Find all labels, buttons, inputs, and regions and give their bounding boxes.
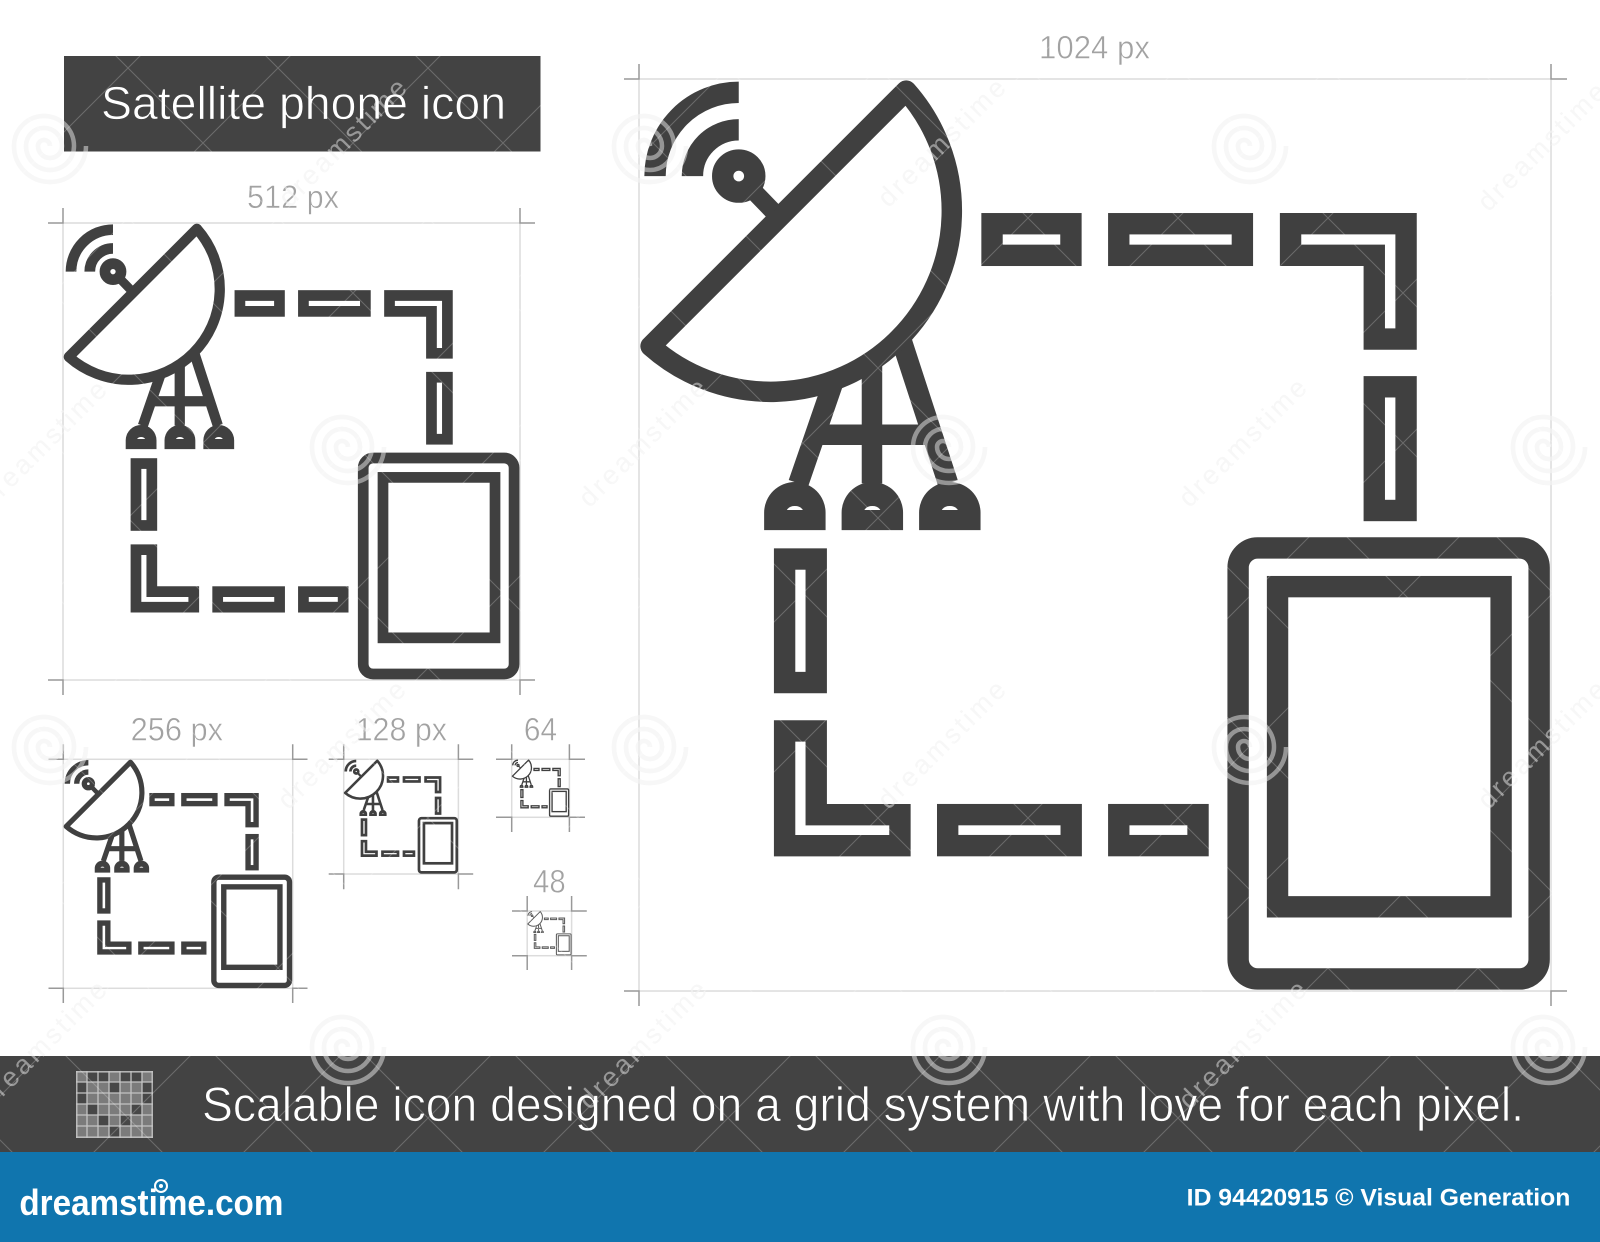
satellite phone icon: 48 px bbox=[528, 912, 571, 955]
satellite phone icon: 64 px bbox=[512, 760, 569, 816]
tagline text: Scalable icon designed on a grid system with love for each pixel. bbox=[202, 1079, 1524, 1132]
size label: 256 px: 256 px bbox=[131, 712, 223, 748]
tagline band bbox=[0, 1056, 1600, 1152]
footer bar bbox=[0, 1152, 1600, 1242]
size label: 64: 64 bbox=[524, 712, 557, 748]
size label: 48: 48 bbox=[533, 864, 566, 900]
satellite phone icon: 512 px bbox=[69, 229, 514, 674]
frame: 128 px bbox=[329, 744, 473, 889]
satellite dish bbox=[651, 91, 952, 392]
satellite phone icon: 256 px bbox=[66, 762, 289, 985]
size label: 128 px: 128 px bbox=[356, 712, 447, 748]
frame: 512 px bbox=[48, 208, 535, 695]
title banner: Satellite phone icon bbox=[101, 77, 506, 129]
size label: 512 px: 512 px bbox=[247, 179, 339, 215]
size label: 1024 px: 1024 px bbox=[1039, 30, 1150, 66]
frame: 48 px bbox=[512, 896, 587, 970]
title banner bbox=[64, 56, 540, 152]
tripod legs bbox=[798, 333, 948, 483]
signal waves bbox=[655, 92, 739, 176]
phone screen bbox=[1278, 587, 1501, 907]
satellite phone icon: 1024 px bbox=[651, 91, 1539, 979]
frame: 64 px bbox=[496, 744, 585, 832]
tripod feet bbox=[764, 482, 981, 530]
dashed signal path bbox=[785, 224, 1406, 846]
frame: 1024 px bbox=[624, 64, 1567, 1006]
phone body bbox=[1238, 548, 1539, 979]
image credit: ID 94420915 © Visual Generation bbox=[1187, 1185, 1570, 1212]
frame: 256 px bbox=[48, 744, 308, 1003]
antenna feed bbox=[723, 160, 773, 212]
satellite phone icon: 128 px bbox=[345, 761, 457, 872]
grid icon bbox=[76, 1071, 153, 1138]
dreamstime logo: dreamstime.com bbox=[19, 1182, 283, 1223]
